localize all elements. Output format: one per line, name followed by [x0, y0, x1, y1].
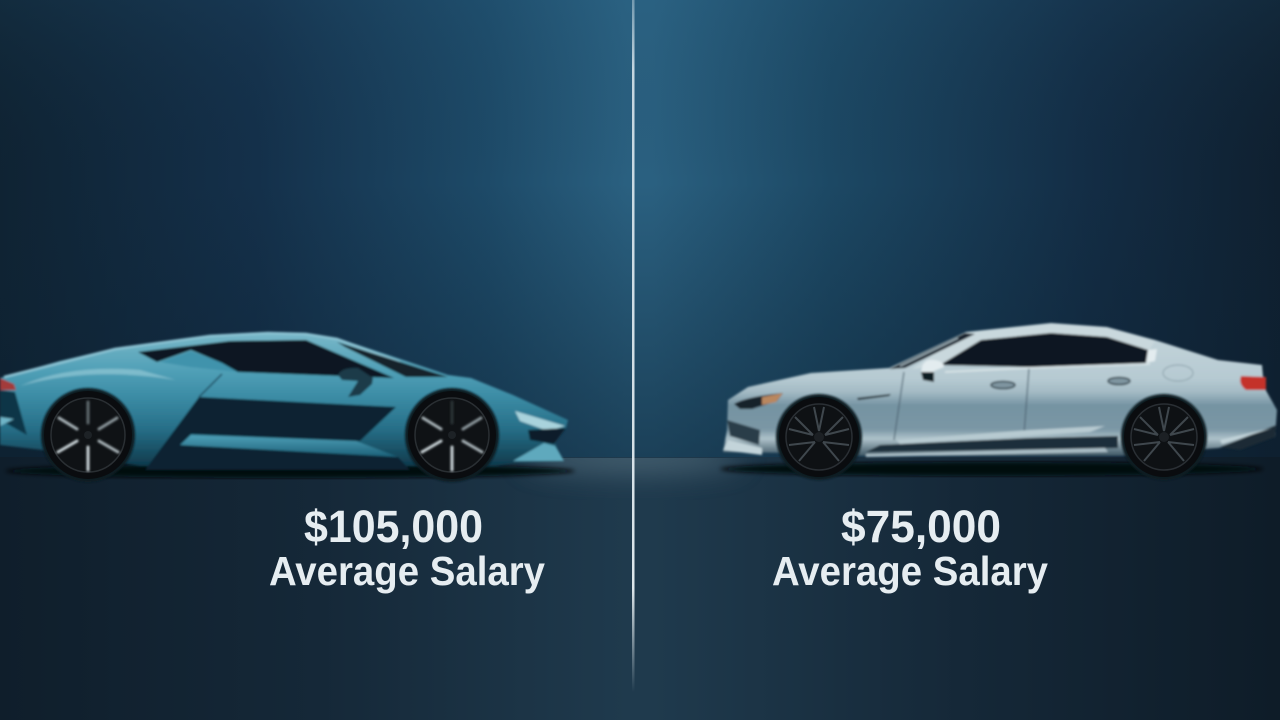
- front grille: [727, 420, 760, 445]
- belt line: [945, 364, 1150, 372]
- floor: [222, 457, 1278, 720]
- lower highlight: [896, 426, 1105, 444]
- door seam: [199, 374, 222, 397]
- wing mirror: [921, 360, 944, 382]
- left salary caption: Average Salary: [269, 548, 545, 594]
- front intake: [513, 443, 564, 461]
- headlight: [734, 393, 783, 409]
- windshield: [337, 342, 448, 377]
- upper lip highlight: [4, 333, 400, 377]
- sports car rear wheel: [44, 391, 132, 479]
- divider line: [632, 0, 634, 692]
- car: teal sports car: [0, 332, 575, 482]
- tail light: [0, 378, 16, 390]
- rocker dark band: [866, 436, 1118, 452]
- lower side sill: [180, 435, 398, 457]
- rear vent: [0, 390, 27, 435]
- headlight: [515, 411, 565, 431]
- rear quarter glass: [1146, 349, 1157, 363]
- rear quarter fin: [160, 351, 238, 372]
- left salary label: [269, 501, 545, 594]
- sedan body: [723, 323, 1277, 457]
- sedan rear wheel: [1124, 397, 1204, 477]
- side windows: [940, 333, 1148, 367]
- wheel arches: [41, 388, 499, 482]
- sedan shadow: [720, 462, 1264, 476]
- tail light: [1240, 376, 1266, 390]
- shoulder highlight: [20, 369, 176, 386]
- sports car body: [0, 332, 568, 470]
- background wall: [0, 0, 1280, 458]
- sedan front wheel: [779, 397, 859, 477]
- car: silver sedan: [720, 323, 1277, 480]
- fuel door: [1163, 365, 1193, 381]
- dark side panel: [145, 397, 410, 470]
- rear bumper: [1220, 425, 1276, 450]
- roof highlight: [912, 324, 1155, 369]
- right salary caption: Average Salary: [772, 548, 1048, 594]
- side window: [138, 340, 394, 378]
- right salary figure: $75,000: [841, 501, 1001, 552]
- right salary label: [772, 501, 1048, 594]
- windshield: [889, 333, 975, 369]
- door handles: [991, 381, 1015, 389]
- wing mirror: [338, 368, 373, 397]
- left salary figure: $105,000: [304, 501, 483, 552]
- wheel arches: [776, 394, 1207, 480]
- door seams: [894, 368, 1029, 440]
- fender vent: [857, 394, 891, 400]
- sports car front wheel: [408, 391, 496, 479]
- sports car shadow: [5, 464, 575, 478]
